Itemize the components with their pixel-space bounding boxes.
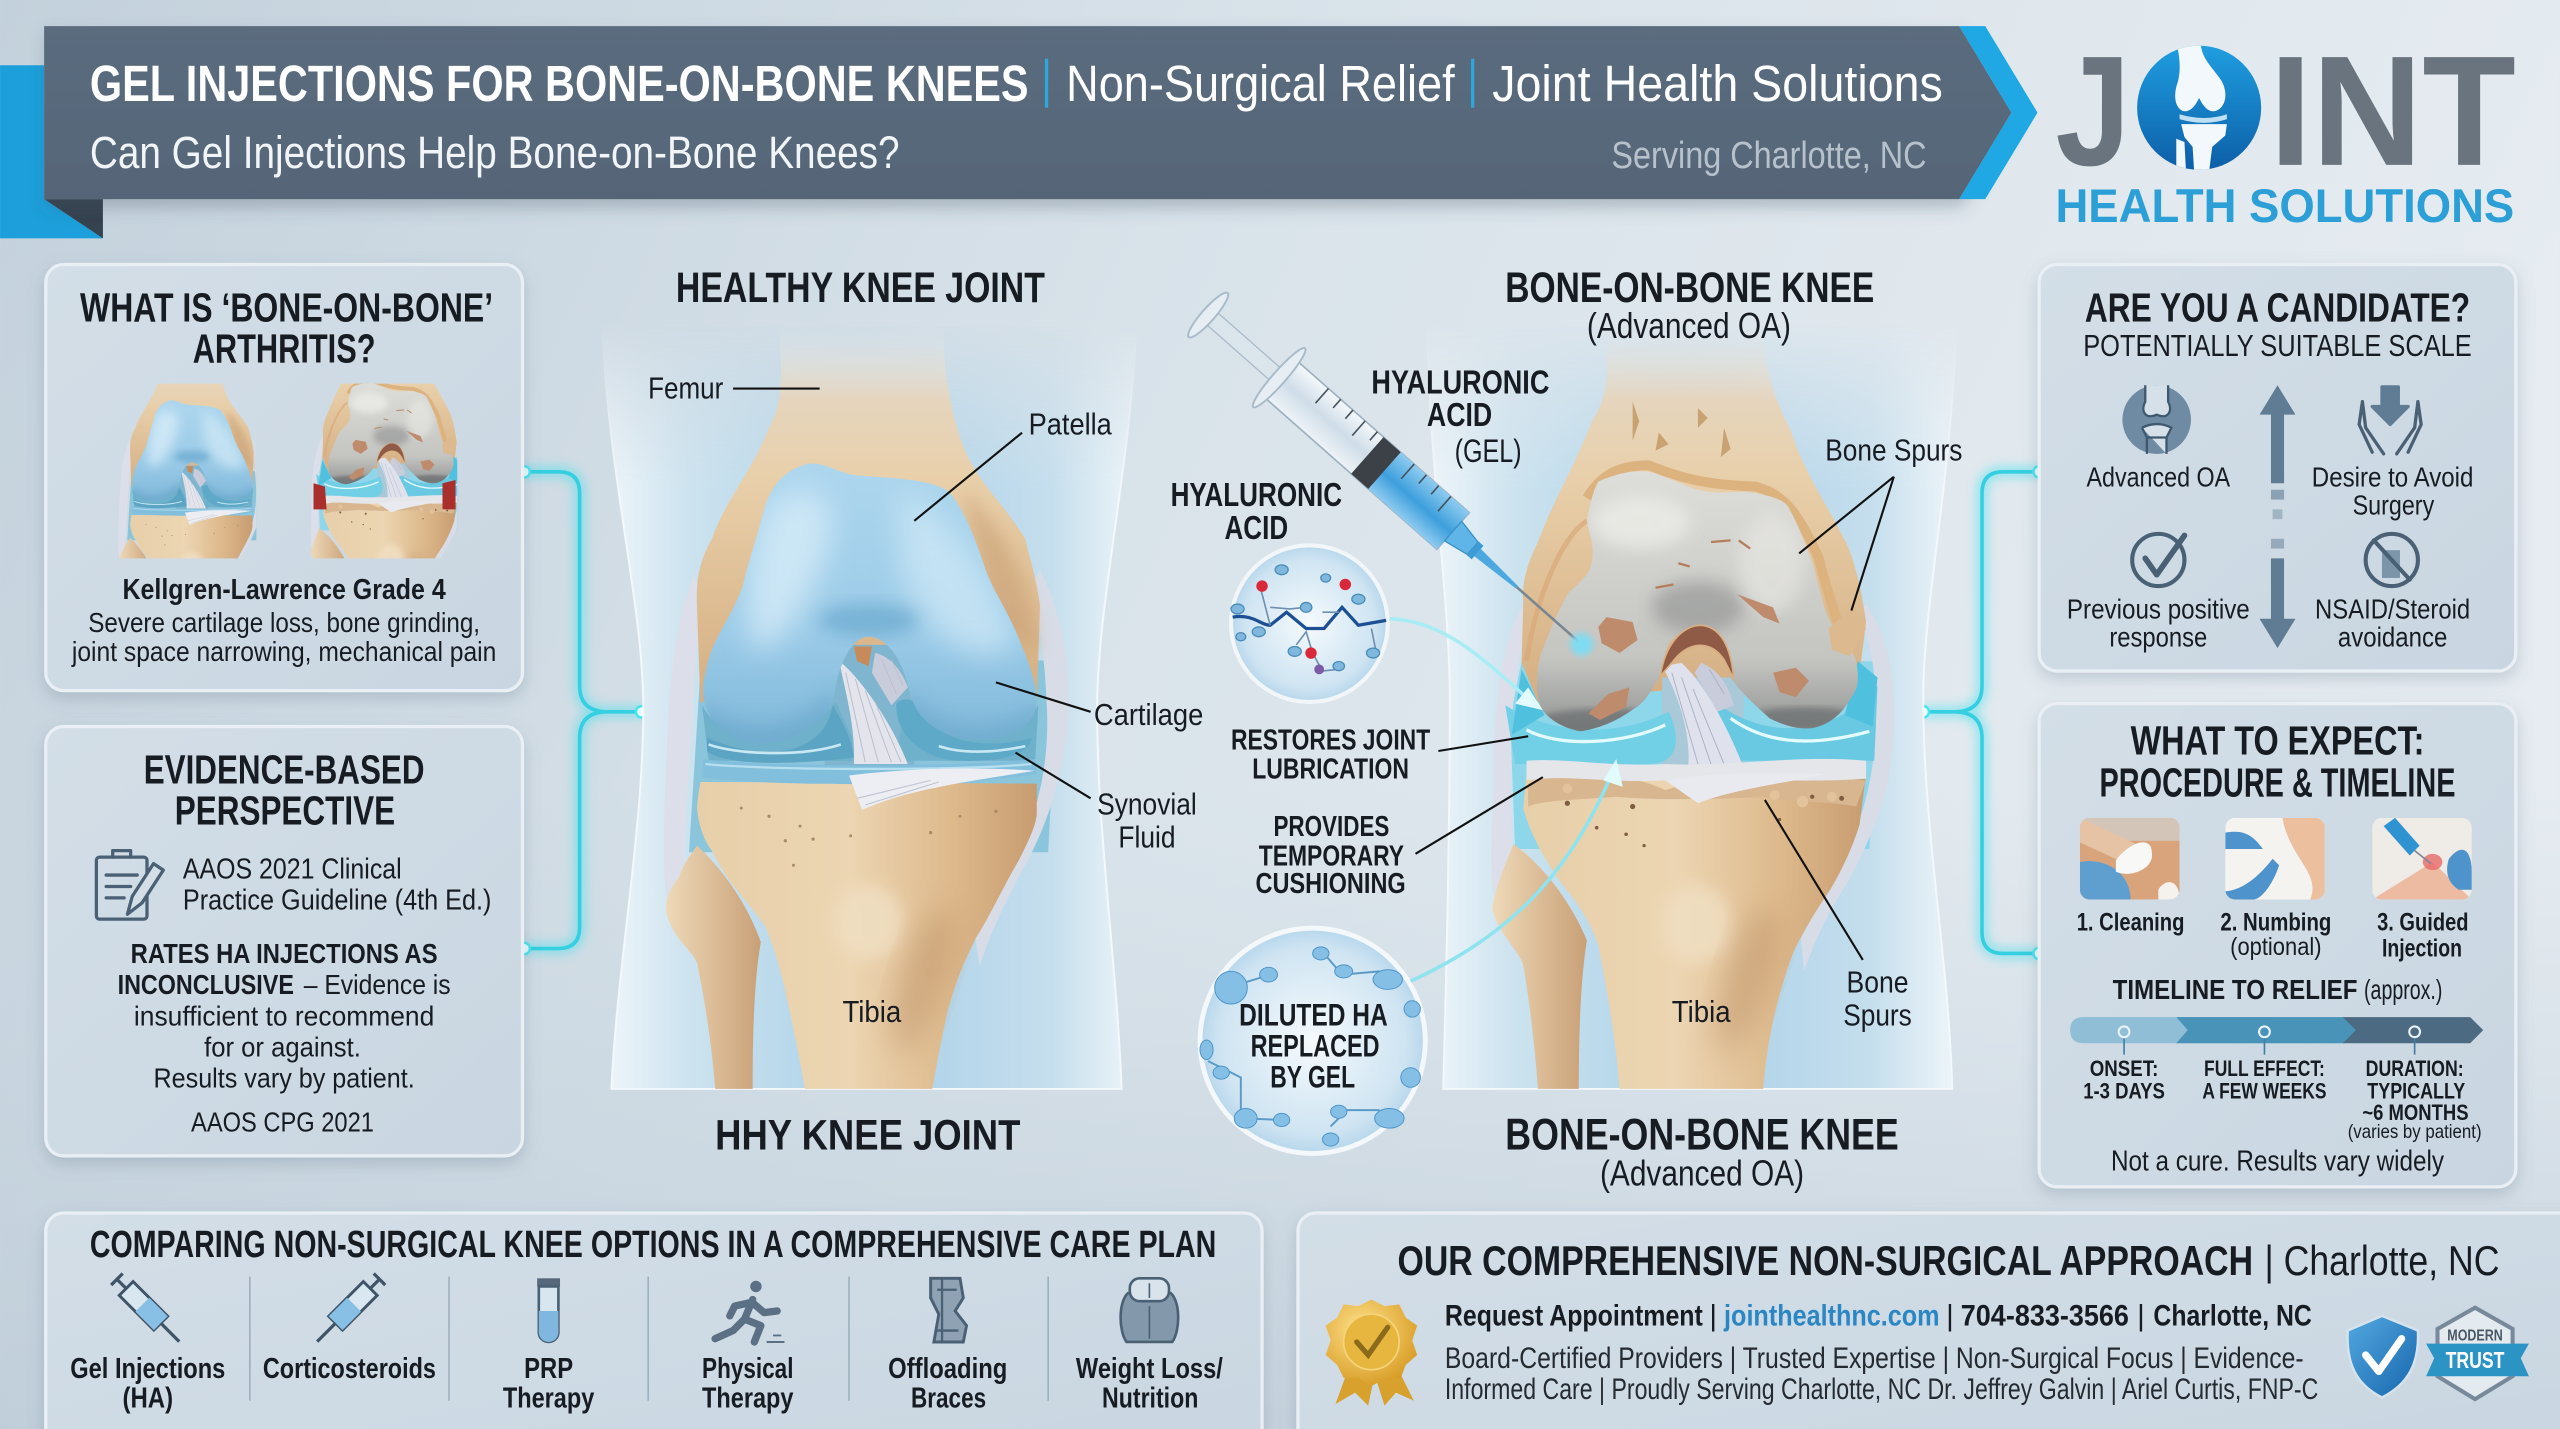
panel heading: PERSPECTIVE (175, 787, 395, 833)
logo wordmark: J (2055, 24, 2131, 199)
panel heading (2083, 285, 2472, 363)
thumbnail: damaged knee (310, 384, 458, 558)
label: lower bone spurs (1765, 800, 1912, 1032)
healthy knee illustration (602, 325, 1203, 1089)
contact line: | (1946, 1300, 1954, 1333)
source note: AAOS CPG 2021 (191, 1106, 374, 1137)
heading: healthy knee top: HEALTHY KNEE JOINT (676, 264, 1045, 311)
label: hyaluronic acid gel (1371, 364, 1549, 469)
arrow: diluted HA to joint (1411, 759, 1623, 981)
icon: modern trust badge (2426, 1308, 2529, 1399)
timeline stage labels (2083, 1056, 2482, 1143)
option caption: PRP (524, 1353, 573, 1385)
bone-on-bone backdrop (1427, 325, 1956, 1089)
contact line: | (1709, 1300, 1717, 1333)
callout: provides temporary cushioning: CUSHIONING (1256, 868, 1406, 900)
candidate criteria labels: Surgery (2353, 489, 2434, 520)
panel heading: POTENTIALLY SUITABLE SCALE (2083, 330, 2472, 363)
grade description: Severe cartilage loss, bone grinding, (88, 607, 480, 638)
healthy knee anatomy (664, 325, 1068, 1089)
step captions: 1. Cleaning (2077, 909, 2184, 937)
credentials text: Informed Care | Proudly Serving Charlotte, NC Dr. Jeffrey Galvin | Ariel Curtis, FNP-C (1445, 1373, 2318, 1406)
banner title: Joint Health Solutions (1492, 55, 1943, 112)
label: tibia: Tibia (842, 996, 901, 1029)
evidence statement: for or against. (204, 1031, 361, 1062)
heading: bone-on-bone top: (Advanced OA) (1587, 305, 1791, 346)
icon: gold badge (1326, 1300, 1417, 1406)
icon: modern trust badge: MODERN (2447, 1327, 2503, 1344)
evidence statement: – Evidence is (304, 969, 451, 1000)
evidence statement: RATES HA INJECTIONS AS (131, 938, 438, 969)
callout: provides temporary cushioning: TEMPORARY (1259, 840, 1404, 872)
label: hyaluronic acid molecule (1171, 477, 1342, 547)
bone-on-bone anatomy (1491, 325, 1895, 1089)
panel: evidence-based perspective (46, 726, 522, 1156)
label: hyaluronic acid molecule: HYALURONIC (1171, 477, 1342, 514)
logo wordmark: INT (2269, 24, 2516, 199)
timeline stage labels: (varies by patient) (2348, 1121, 2482, 1143)
candidate criteria labels: Previous positive (2067, 594, 2250, 625)
panel heading: WHAT IS ‘BONE-ON-BONE’ (80, 285, 493, 331)
label: hyaluronic acid gel: HYALURONIC (1371, 364, 1549, 401)
evidence statement: Results vary by patient. (154, 1062, 415, 1093)
callout: restores joint lubrication (1231, 724, 1528, 786)
panel heading: WHAT TO EXPECT: (2131, 717, 2424, 763)
timeline heading: TIMELINE TO RELIEF (2113, 974, 2358, 1005)
candidate criteria labels: NSAID/Steroid (2315, 594, 2470, 625)
panel heading: EVIDENCE-BASED (144, 747, 425, 793)
icon: hands avoiding surgery (2359, 387, 2421, 454)
timeline stage labels: ONSET: (2090, 1056, 2158, 1081)
logo wordmark (2055, 24, 2516, 199)
option: weight loss (1076, 1278, 1223, 1414)
step image: cleaning (2080, 818, 2180, 900)
heading: bone-on-bone bottom (1505, 1110, 1899, 1193)
step captions: Injection (2382, 935, 2462, 963)
heading: bone-on-bone top (1505, 264, 1874, 346)
panel: are you a candidate (2039, 264, 2516, 671)
banner subtitle: Can Gel Injections Help Bone-on-Bone Knees? (90, 127, 900, 178)
contact line: 704-833-3566 (1961, 1300, 2129, 1333)
candidate criteria labels (2067, 462, 2473, 653)
panel: what is bone-on-bone arthritis (46, 264, 522, 691)
callout: provides temporary cushioning (1256, 777, 1543, 900)
label: patella (914, 408, 1112, 521)
icon: clipboard with pencil (96, 851, 163, 919)
timeline stage labels: DURATION: (2366, 1056, 2464, 1081)
icon: advanced OA knee (2122, 385, 2191, 454)
label: hyaluronic acid molecule: ACID (1224, 510, 1288, 547)
guideline citation: AAOS 2021 Clinical (183, 853, 402, 885)
option caption: Therapy (503, 1382, 594, 1414)
panel heading: COMPARING NON-SURGICAL KNEE OPTIONS IN A COMPREHENSIVE CARE PLAN (90, 1223, 1216, 1265)
thumbnail: healthy knee (118, 384, 256, 558)
option: PRP therapy (503, 1278, 594, 1414)
option: gel injections (70, 1272, 225, 1414)
credentials text (1445, 1342, 2318, 1406)
grade heading: Kellgren-Lawrence Grade 4 (122, 574, 446, 606)
heading: bone-on-bone bottom: (Advanced OA) (1600, 1152, 1804, 1193)
guideline citation (183, 853, 491, 916)
panel heading (2100, 717, 2455, 806)
label: hyaluronic acid gel: ACID (1427, 397, 1492, 434)
label: synovial fluid (1016, 753, 1197, 854)
syringe injecting gel (1177, 281, 1616, 681)
label: upper bone spurs (1799, 434, 1962, 611)
step captions: (optional) (2230, 933, 2322, 961)
arrow: molecule to joint (1389, 619, 1543, 710)
label: cartilage (996, 682, 1203, 732)
label: tibia: Tibia (1672, 996, 1731, 1029)
option caption: Nutrition (1102, 1382, 1198, 1414)
healthy knee labels (648, 372, 1203, 1029)
callout: restores joint lubrication: RESTORES JOINT (1231, 724, 1431, 756)
option caption: Therapy (702, 1382, 794, 1414)
timeline bar (2070, 1017, 2483, 1055)
option: corticosteroids (263, 1272, 436, 1385)
option caption: Corticosteroids (263, 1353, 436, 1385)
banner title: Non-Surgical Relief (1066, 55, 1456, 112)
heading: healthy knee bottom: HHY KNEE JOINT (715, 1111, 1020, 1158)
label: synovial fluid: Fluid (1118, 821, 1176, 854)
banner bar with chevron (44, 26, 2038, 199)
option caption: Physical (702, 1353, 793, 1385)
connector lines (518, 466, 2045, 959)
icon: runner (715, 1281, 784, 1342)
icon: test tube (537, 1278, 560, 1342)
contact line: jointhealthnc.com (1723, 1300, 1940, 1333)
label: hyaluronic acid gel: (GEL) (1455, 432, 1522, 469)
label: patella: Patella (1029, 408, 1112, 441)
label: lower bone spurs: Spurs (1843, 999, 1912, 1032)
step captions: 2. Numbing (2220, 909, 2331, 937)
option caption (70, 1353, 225, 1414)
candidate criteria labels: response (2109, 622, 2207, 653)
logo tagline: HEALTH SOLUTIONS (2055, 180, 2514, 233)
diluted HA circle (1200, 928, 1425, 1153)
credentials text: Board-Certified Providers | Trusted Expertise | Non-Surgical Focus | Evidence- (1445, 1342, 2304, 1375)
timeline stage labels: 1-3 DAYS (2083, 1079, 2165, 1104)
option caption (702, 1353, 794, 1414)
label: lower bone spurs: Bone (1847, 967, 1909, 1000)
option caption (1076, 1353, 1223, 1414)
panel heading (80, 285, 493, 371)
option: offloading braces (888, 1278, 1007, 1414)
label: upper bone spurs: Bone Spurs (1825, 434, 1962, 467)
header banner (0, 26, 2038, 238)
logo (2058, 46, 2514, 222)
option caption: Gel Injections (70, 1353, 225, 1385)
candidate criteria labels: Desire to Avoid (2312, 462, 2473, 493)
step image: numbing (2225, 818, 2325, 900)
heading: bone-on-bone top: BONE-ON-BONE KNEE (1505, 264, 1874, 311)
panel heading: OUR COMPREHENSIVE NON-SURGICAL APPROACH (1398, 1237, 2253, 1284)
contact line: Request Appointment (1445, 1300, 1703, 1333)
timeline stage labels: TYPICALLY (2367, 1079, 2466, 1104)
timeline stage labels: ~6 MONTHS (2362, 1100, 2469, 1125)
heading: bone-on-bone bottom: BONE-ON-BONE KNEE (1505, 1110, 1899, 1159)
molecule circle (1231, 545, 1388, 702)
candidate scale arrow (2260, 385, 2295, 648)
evidence statement: INCONCLUSIVE (118, 969, 294, 1000)
step image: guided injection (2372, 818, 2472, 900)
grade description: joint space narrowing, mechanical pain (71, 636, 496, 667)
label: cartilage: Cartilage (1094, 699, 1203, 732)
timeline stage labels: A FEW WEEKS (2202, 1079, 2326, 1104)
candidate criteria labels: Advanced OA (2086, 462, 2231, 493)
candidate criteria labels: avoidance (2338, 622, 2447, 653)
circle caption (1239, 996, 1388, 1094)
panel: comparing non-surgical options (46, 1213, 1262, 1429)
bone-on-bone labels (1672, 434, 1962, 1032)
disclaimer: Not a cure. Results vary widely (2111, 1146, 2445, 1178)
option caption: Offloading (888, 1353, 1007, 1385)
banner title (90, 55, 1943, 112)
guideline citation: Practice Guideline (4th Ed.) (183, 884, 491, 916)
timeline stage labels: FULL EFFECT: (2204, 1056, 2325, 1081)
icon: positive check (2132, 534, 2184, 586)
evidence statement: insufficient to recommend (134, 1000, 434, 1031)
panel: comprehensive approach (1298, 1213, 2560, 1429)
circle caption: DILUTED HA (1239, 996, 1388, 1032)
location note: Serving Charlotte, NC (1611, 134, 1927, 177)
label: synovial fluid: Synovial (1097, 789, 1197, 822)
icon: shield (2348, 1316, 2418, 1397)
contact line: | (2137, 1300, 2145, 1333)
icon: modern trust badge: TRUST (2446, 1347, 2504, 1373)
contact line (1445, 1300, 2312, 1333)
option caption: (HA) (122, 1382, 173, 1414)
option caption (503, 1353, 594, 1414)
circle caption: BY GEL (1270, 1058, 1355, 1094)
label: femur: Femur (648, 372, 723, 405)
ribbon fold (0, 65, 103, 238)
healthy knee backdrop (602, 325, 1136, 1089)
panel heading (144, 747, 425, 833)
evidence statement (118, 938, 451, 1093)
option: physical therapy (702, 1281, 794, 1414)
panel heading: | Charlotte, NC (2264, 1237, 2500, 1284)
bone-on-bone knee illustration (1427, 325, 1962, 1089)
icon: gel syringe (110, 1272, 186, 1349)
step captions: 3. Guided (2377, 909, 2469, 937)
logo knee emblem (2137, 42, 2261, 173)
option caption: Braces (911, 1382, 986, 1414)
panel heading: ARTHRITIS? (193, 325, 376, 371)
icon: scale (1121, 1278, 1178, 1342)
contact line: Charlotte, NC (2153, 1300, 2312, 1333)
option caption (888, 1353, 1007, 1414)
banner title: GEL INJECTIONS FOR BONE-ON-BONE KNEES (90, 55, 1029, 112)
callout: provides temporary cushioning: PROVIDES (1273, 811, 1389, 843)
circle caption: REPLACED (1251, 1027, 1380, 1063)
callout: restores joint lubrication: LUBRICATION (1252, 754, 1409, 786)
panel: what to expect (2039, 704, 2516, 1187)
grade description (71, 607, 496, 667)
icon: steroid syringe (310, 1272, 386, 1349)
timeline heading: (approx.) (2364, 974, 2442, 1005)
icon: brace (931, 1278, 967, 1342)
option caption: Weight Loss/ (1076, 1353, 1223, 1385)
step captions (2077, 909, 2469, 963)
icon: no pills (2366, 534, 2418, 586)
